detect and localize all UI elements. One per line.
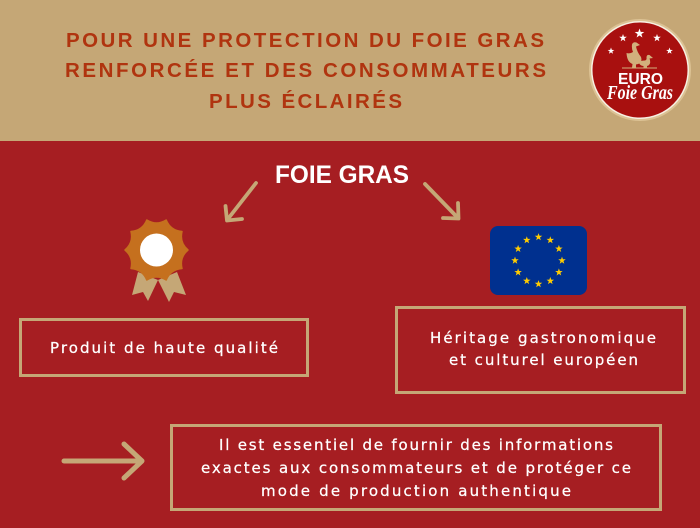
title: RENFORCÉE ET DES CONSOMMATEURS [65, 59, 546, 82]
arrow: to heritage [425, 184, 458, 218]
logo: Euro Foie Gras: EURO [618, 71, 663, 88]
panel: high quality product [20, 320, 308, 376]
panel: high quality product: Produit de haute qualité [50, 339, 278, 357]
logo: Euro Foie Gras: Foie Gras [606, 82, 673, 104]
panel: European heritage: et culturel européen [449, 351, 638, 369]
title [65, 29, 546, 113]
panel: conclusion: exactes aux consommateurs et de protéger ce [201, 459, 631, 477]
arrow: to quality [226, 183, 256, 220]
panel: conclusion: Il est essentiel de fournir des informations [219, 436, 613, 454]
heading: Foie Gras: FOIE GRAS [275, 161, 409, 189]
header band [0, 0, 700, 141]
arrow: to conclusion [64, 444, 142, 478]
panel: conclusion: mode de production authentique [261, 482, 571, 500]
panel: European heritage [396, 308, 684, 392]
panel: conclusion [172, 426, 660, 510]
panel: European heritage: Héritage gastronomique [430, 329, 656, 347]
logo: Euro Foie Gras [589, 19, 691, 121]
title: POUR UNE PROTECTION DU FOIE GRAS [66, 29, 544, 52]
title: PLUS ÉCLAIRÉS [209, 90, 402, 113]
icon: EU flag [490, 226, 587, 295]
icon: quality medal [125, 220, 188, 302]
